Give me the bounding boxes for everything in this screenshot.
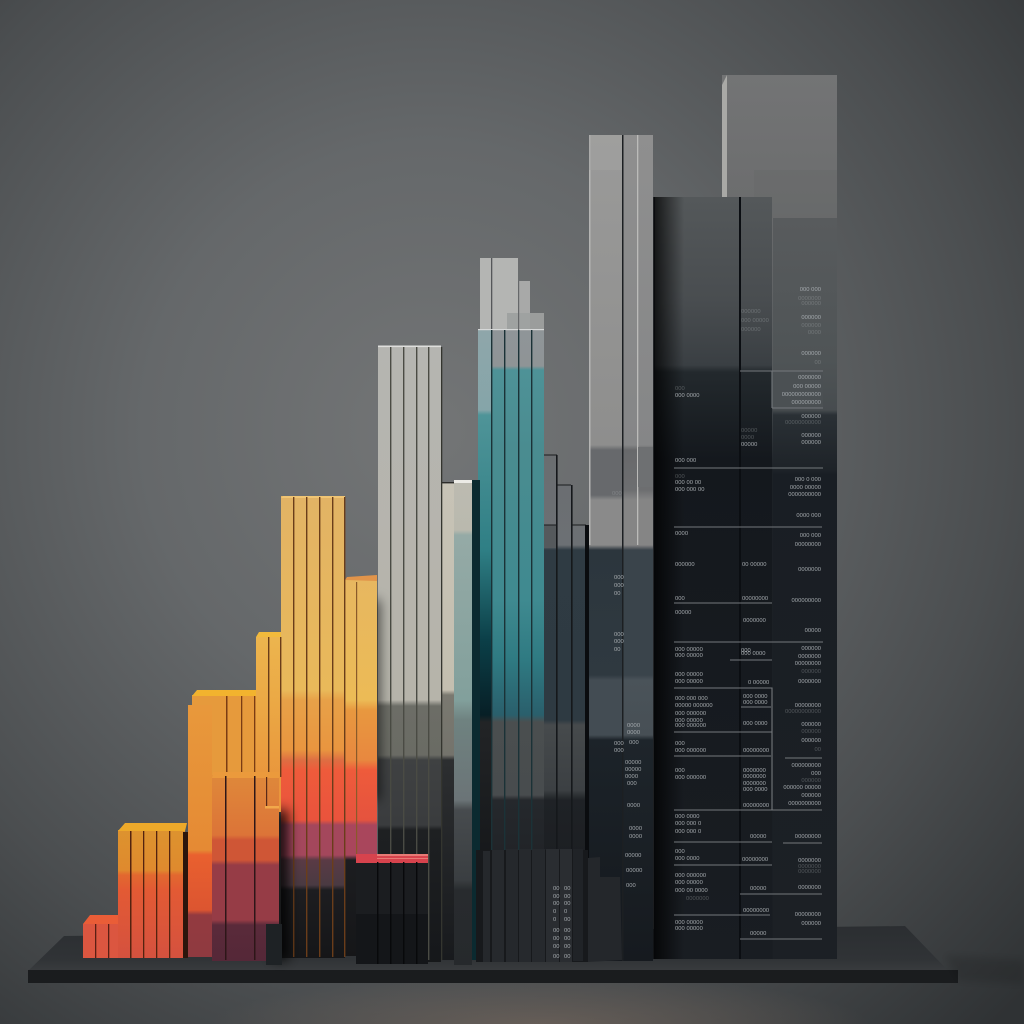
data table text: 0000000 (798, 679, 821, 685)
data table text: 000 (675, 849, 685, 855)
data table text: 000 (675, 596, 685, 602)
data table text: 000 00000 (675, 920, 703, 926)
book spine labels: 00 (553, 928, 560, 934)
data table text: 000 00000 (675, 672, 703, 678)
front dark panel (653, 197, 823, 959)
data table text: 0000000 (686, 896, 709, 902)
data table text: 000 0000 (743, 787, 768, 793)
mid tower labels: 0000 (627, 730, 640, 736)
data table text: 00000 (741, 442, 757, 448)
data table text: 00000000 (742, 857, 768, 863)
data table text: 000 000 (800, 287, 821, 293)
mid tower labels: 000 (614, 575, 624, 581)
data table text: 000000 (741, 309, 761, 315)
mid tower labels: 000 (614, 583, 624, 589)
data table text: 00000000 (795, 912, 821, 918)
teal tower (472, 258, 544, 962)
data table text: 000 00000 (675, 718, 703, 724)
data table text: 000 0000 (743, 721, 768, 727)
data table text: 000 000 0 (675, 821, 701, 827)
data table text: 00000000 (795, 542, 821, 548)
book spine labels: 00 (553, 954, 560, 960)
data table text: 000000000 (792, 400, 821, 406)
book spine labels: 0 (553, 917, 556, 923)
data table text: 0000000 (798, 869, 821, 875)
mid tower labels: 000 (612, 491, 622, 497)
mid tower labels: 0000 (627, 723, 640, 729)
data table text: 000 00000 (675, 653, 703, 659)
book spine labels: 00 (553, 901, 560, 907)
data table text: 000000 (801, 722, 821, 728)
book spine labels: 0 (553, 909, 556, 915)
data table text: 000 000000 (675, 711, 706, 717)
data table text: 00 (814, 360, 821, 366)
left orange block (118, 823, 188, 958)
big back tower (722, 75, 837, 959)
data table text: 000 (675, 741, 685, 747)
data table text: 000000 (675, 562, 695, 568)
gray tower (366, 346, 472, 965)
data table text: 00000 (741, 428, 757, 434)
data table text: 000000 (741, 327, 761, 333)
data table text: 0000000 (743, 768, 766, 774)
mid tower labels: 000 (614, 741, 624, 747)
data table text: 00000000 (742, 596, 768, 602)
book spine labels: 00 (564, 886, 571, 892)
data table text: 0000000 (798, 375, 821, 381)
data table text: 0000000000 (788, 492, 821, 498)
small stepped gray towers (544, 455, 589, 960)
mid tower labels: 000 (627, 781, 637, 787)
data table text: 000 0000 (675, 856, 700, 862)
data table text: 00000000000 (785, 709, 821, 715)
data table text: 000 00 0000 (675, 888, 708, 894)
data table text: 00000 000000 (675, 703, 713, 709)
data table text: 0000 000 (796, 513, 821, 519)
data table text: 000000 (801, 323, 821, 329)
data table text: 0000000 (743, 774, 766, 780)
data table text: 000000 00000 (783, 785, 821, 791)
front orange block (212, 772, 282, 965)
data table text: 000000000 (792, 598, 821, 604)
data table text: 0000 (741, 435, 754, 441)
data table text: 00000000 (743, 803, 769, 809)
data table text: 000000 (801, 738, 821, 744)
book spine labels: 00 (564, 954, 571, 960)
data table text: 000 (675, 768, 685, 774)
mid tower labels: 000 (614, 748, 624, 754)
data table text: 000 00000 (741, 318, 769, 324)
data table text: 000000 (801, 414, 821, 420)
dark block with red top (356, 854, 428, 964)
book spine labels (553, 886, 571, 960)
data table text: 000000 (801, 433, 821, 439)
data table text: 0000000 (743, 781, 766, 787)
data table text: 0000000 (743, 618, 766, 624)
data table text: 000 000 0 (675, 829, 701, 835)
data table text: 000000 (801, 646, 821, 652)
data table text: 00000 (750, 931, 766, 937)
data table text: 0000000 (798, 864, 821, 870)
mid tower labels: 0000 (629, 826, 642, 832)
data table text (675, 287, 821, 937)
data table text: 000 (811, 771, 821, 777)
back orange block (188, 690, 256, 957)
data table text: 000 0 000 (795, 477, 821, 483)
data table text: 0000000 (798, 296, 821, 302)
data table text: 000000000 (792, 763, 821, 769)
data table text: 000 000 000 (675, 696, 708, 702)
mid tower labels: 000 (626, 883, 636, 889)
book spine labels: 00 (553, 936, 560, 942)
data table text: 0000000 (798, 885, 821, 891)
book spine labels: 00 (564, 936, 571, 942)
front dark books with text (476, 849, 588, 962)
data table text: 000000000000 (782, 392, 821, 398)
data table text: 0000000 (798, 858, 821, 864)
mid tower labels: 00000 (625, 767, 641, 773)
data table text: 0000000000 (788, 801, 821, 807)
data table text: 000 00000 (675, 679, 703, 685)
data table text: 00000000000 (785, 420, 821, 426)
platform (28, 926, 1024, 984)
data table text: 00000000 (795, 661, 821, 667)
data table text: 000000 (801, 778, 821, 784)
data table text: 000000 (801, 793, 821, 799)
data table text: 000 0000 (675, 393, 700, 399)
data table text: 000 00000 (675, 926, 703, 932)
data table text: 000 000000 (675, 723, 706, 729)
mid tower labels: 00 (614, 647, 621, 653)
data table text: 000 000 (675, 458, 696, 464)
data table text: 00000000 (795, 834, 821, 840)
data table text: 0000 (675, 531, 688, 537)
data table text: 000000 (801, 921, 821, 927)
book spine labels: 00 (564, 917, 571, 923)
data table text: 00000 (675, 610, 691, 616)
mid tower labels: 00000 (626, 868, 642, 874)
mid tower labels: 000 (614, 632, 624, 638)
data table text: 000 000000 (675, 748, 706, 754)
data table text: 000 (741, 648, 751, 654)
mid tower labels (612, 491, 642, 889)
data table text: 000000 (801, 440, 821, 446)
data table text: 000 000 (800, 533, 821, 539)
stepped orange column (256, 632, 281, 812)
book spine labels: 00 (553, 944, 560, 950)
data table text: 000 0000 (675, 814, 700, 820)
data table text: 00000 (805, 628, 821, 634)
data table text: 00000000 (743, 748, 769, 754)
data table text: 00 00000 (742, 562, 767, 568)
mid tower labels: 000 (614, 639, 624, 645)
data table rule lines (674, 371, 823, 939)
book spine labels: 00 (564, 894, 571, 900)
data table text: 000 (675, 474, 685, 480)
floor glow (210, 975, 870, 1024)
data table text: 000 00000 (675, 880, 703, 886)
mid tower labels: 00000 (625, 760, 641, 766)
data table text: 000 0000 (743, 700, 768, 706)
mid tower labels: 0000 (627, 803, 640, 809)
data table text: 000000 (801, 315, 821, 321)
book spine labels: 00 (553, 886, 560, 892)
data table text: 00000 (750, 834, 766, 840)
data table text: 000 00 00 (675, 480, 701, 486)
mid tower labels: 0000 (625, 774, 638, 780)
mid tower labels: 00 (614, 591, 621, 597)
data table text: 000 0000 (743, 694, 768, 700)
data table text: 00000000 (795, 703, 821, 709)
mid tower labels: 00000 (625, 853, 641, 859)
data table text: 000 00000 (793, 384, 821, 390)
data table text: 0000 00000 (790, 485, 821, 491)
book spine labels: 00 (564, 901, 571, 907)
data table text: 0000 (808, 330, 821, 336)
data table text: 000000 (801, 351, 821, 357)
data table text: 0000000 (798, 654, 821, 660)
data table text: 000000 (801, 669, 821, 675)
data table text: 000000 (801, 729, 821, 735)
data table text: 00 (814, 747, 821, 753)
data table text: 0000000 (798, 567, 821, 573)
data table text: 000 000000 (675, 873, 706, 879)
data table text: 00000000 (743, 908, 769, 914)
data table text: 000 (675, 386, 685, 392)
small red block (83, 915, 118, 958)
data table text: 000 000 00 (675, 487, 705, 493)
data table text: 000000 (801, 301, 821, 307)
yellow orange tower (272, 496, 377, 960)
data table text: 0 00000 (748, 680, 769, 686)
data table text: 00000 (750, 886, 766, 892)
mid tower labels: 0000 (629, 834, 642, 840)
gray mid tower (589, 135, 653, 961)
stepped dark block (588, 857, 622, 962)
data table text: 000 0000 (741, 651, 766, 657)
mid tower labels: 000 (629, 740, 639, 746)
data table text: 000 000000 (675, 775, 706, 781)
book spine labels: 00 (553, 894, 560, 900)
book spine labels: 00 (564, 944, 571, 950)
book spine labels: 00 (564, 928, 571, 934)
book spine labels: 0 (564, 909, 567, 915)
data table text: 000 00000 (675, 647, 703, 653)
